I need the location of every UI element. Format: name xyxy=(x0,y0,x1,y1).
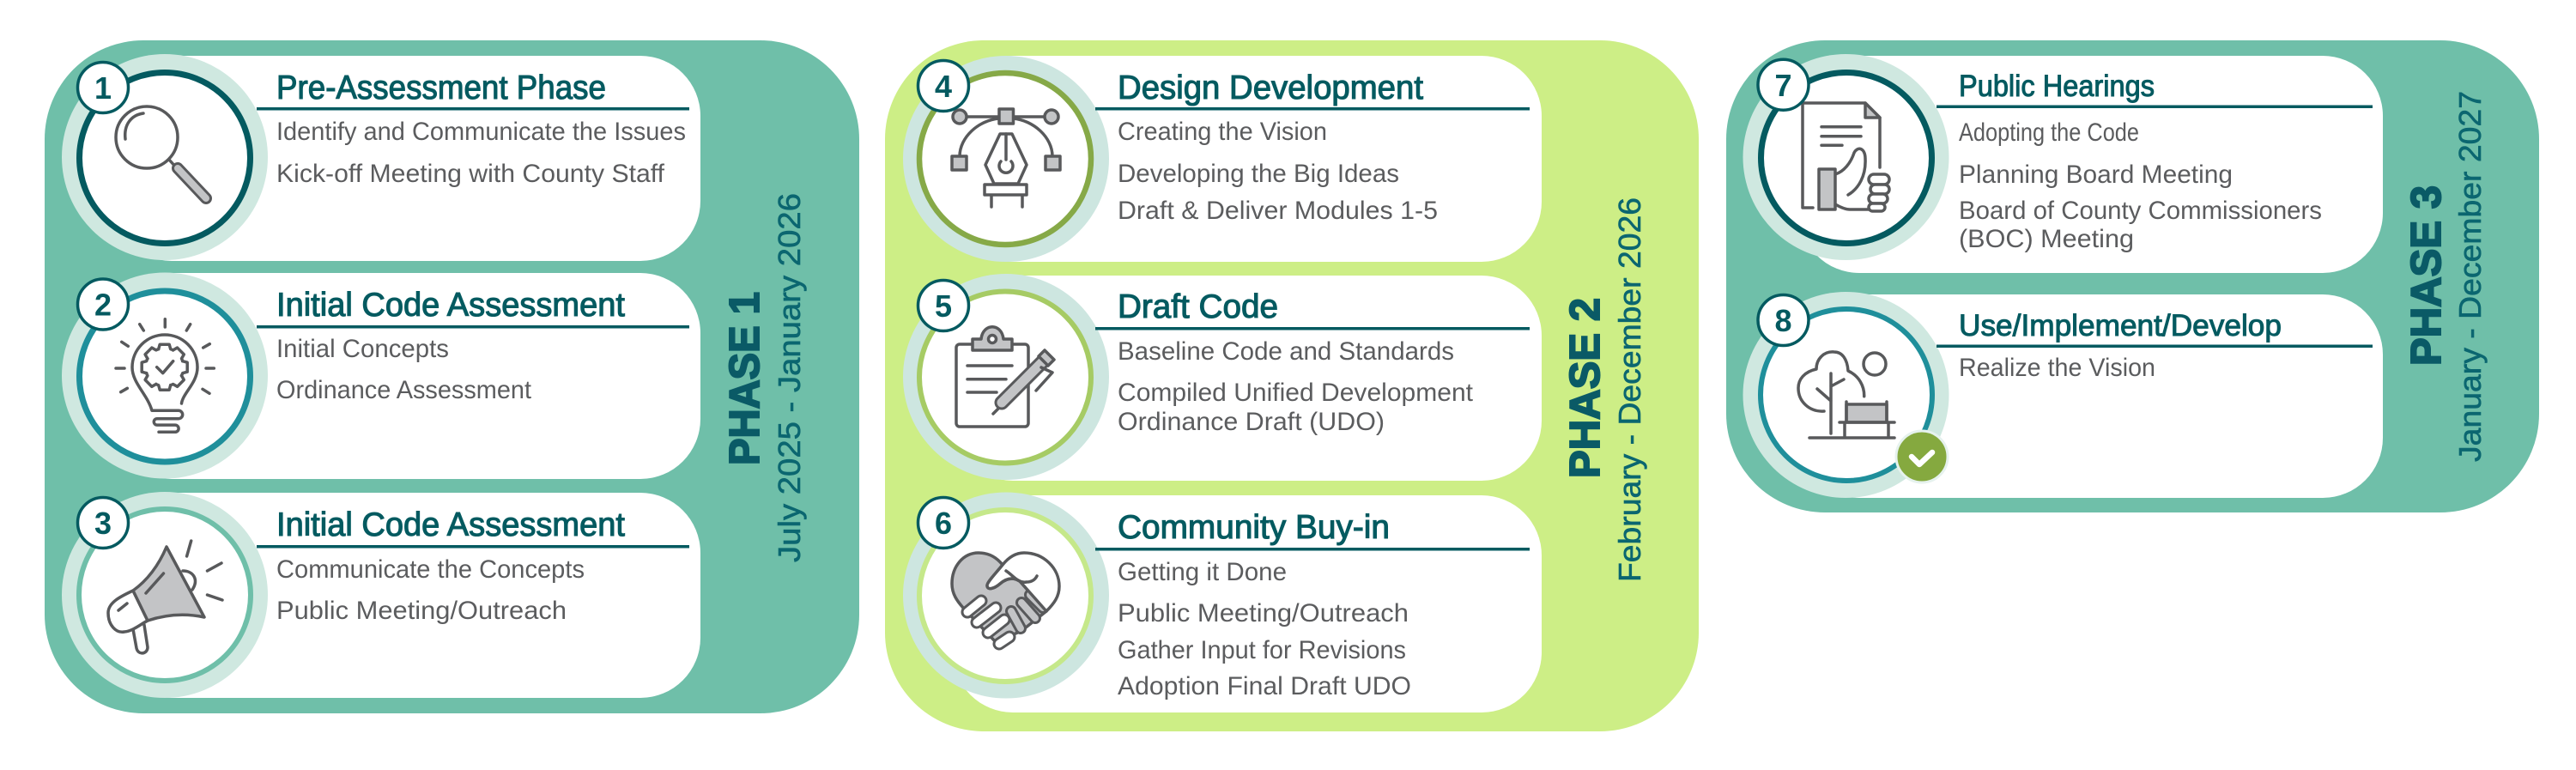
step 4 text: Creating the Vision xyxy=(1118,118,1327,146)
step 3 text: Public Meeting/Outreach xyxy=(276,597,567,625)
badge 4: 4 xyxy=(935,69,952,104)
step 5 text: Ordinance Draft (UDO) xyxy=(1118,408,1385,436)
step 7 text: (BOC) Meeting xyxy=(1959,225,2134,253)
badge 5: 5 xyxy=(935,288,952,324)
badge 7 xyxy=(1758,59,1809,110)
step 6 text: Gather Input for Revisions xyxy=(1118,636,1406,664)
step 6 text xyxy=(1118,558,1411,700)
step 2 text: Initial Concepts xyxy=(276,335,449,363)
step 4 text xyxy=(1118,118,1438,225)
step 7 card xyxy=(1743,54,2383,273)
phase 3 dates: January - December 2027 xyxy=(2452,91,2488,462)
badge 1: 1 xyxy=(94,70,112,106)
icon: document with thumbs up xyxy=(1803,103,1889,211)
badge 8 xyxy=(1758,295,1809,345)
step 1 card xyxy=(62,54,700,261)
badge 2: 2 xyxy=(94,287,112,323)
step 5 title: Draft Code xyxy=(1118,288,1278,325)
step 6 text: Adoption Final Draft UDO xyxy=(1118,672,1411,700)
step 4 text: Developing the Big Ideas xyxy=(1118,160,1399,188)
icon: handshake xyxy=(952,553,1059,644)
badge 8: 8 xyxy=(1774,303,1792,338)
step 3 text xyxy=(276,555,585,625)
step 5 text xyxy=(1118,337,1474,436)
step 8 card xyxy=(1743,292,2383,498)
step 2 title: Initial Code Assessment xyxy=(276,287,625,324)
badge 7: 7 xyxy=(1774,68,1792,103)
icon: magnifying glass xyxy=(116,106,206,198)
step 1 text: Identify and Communicate the Issues xyxy=(276,118,686,146)
step 8 text: Realize the Vision xyxy=(1959,354,2155,382)
panel: phase 3 xyxy=(1726,40,2539,512)
step 1 text xyxy=(276,118,686,188)
phase 2 dates: February - December 2026 xyxy=(1612,197,1647,582)
badge 5 xyxy=(918,280,968,331)
panel: phase 1 xyxy=(45,40,859,713)
phase 1 heading: PHASE 1 xyxy=(722,292,768,465)
phase 2 heading: PHASE 2 xyxy=(1562,298,1609,478)
step 6 text: Getting it Done xyxy=(1118,558,1287,586)
badge 2 xyxy=(77,279,129,330)
icon: pen tool xyxy=(952,109,1060,207)
step 7 text xyxy=(1959,118,2322,253)
step 7 text: Planning Board Meeting xyxy=(1959,161,2233,189)
step 4 title: Design Development xyxy=(1118,70,1423,106)
icon: clipboard and pen xyxy=(956,327,1054,427)
step 8 title: Use/Implement/Develop xyxy=(1959,309,2282,343)
step 7 title: Public Hearings xyxy=(1959,70,2155,103)
step 7 text: Adopting the Code xyxy=(1959,118,2139,147)
step 2 text: Ordinance Assessment xyxy=(276,376,532,404)
step 3 card xyxy=(62,492,700,698)
badge 3 xyxy=(77,498,129,548)
step 6 title: Community Buy-in xyxy=(1118,509,1390,546)
icon: megaphone xyxy=(108,541,222,653)
step 5 text: Compiled Unified Development xyxy=(1118,379,1474,407)
step 2 text xyxy=(276,335,532,404)
badge 6: 6 xyxy=(935,506,952,541)
step 4 card xyxy=(903,56,1542,262)
panel: phase 2 xyxy=(885,40,1699,731)
step 6 card xyxy=(903,493,1542,712)
step 3 title: Initial Code Assessment xyxy=(276,506,625,543)
icon: light bulb with gear xyxy=(116,319,214,432)
badge 6 xyxy=(918,498,968,548)
icon: tree and bench xyxy=(1798,352,1894,438)
step 1 title: Pre-Assessment Phase xyxy=(276,70,606,106)
step 3 text: Communicate the Concepts xyxy=(276,555,585,584)
badge 4 xyxy=(918,60,968,112)
step 2 card xyxy=(62,273,700,479)
phase 1 dates: July 2025 - January 2026 xyxy=(772,193,807,562)
step 4 text: Draft & Deliver Modules 1-5 xyxy=(1118,197,1438,225)
phase 3 heading: PHASE 3 xyxy=(2403,185,2450,366)
step 6 text: Public Meeting/Outreach xyxy=(1118,599,1409,628)
step 5 text: Baseline Code and Standards xyxy=(1118,337,1454,366)
icon: green check badge xyxy=(1896,431,1948,482)
step 7 text: Board of County Commissioners xyxy=(1959,197,2322,225)
badge 1 xyxy=(77,62,129,113)
step 1 text: Kick-off Meeting with County Staff xyxy=(276,160,665,188)
step 5 card xyxy=(903,274,1542,481)
badge 3: 3 xyxy=(94,506,112,541)
